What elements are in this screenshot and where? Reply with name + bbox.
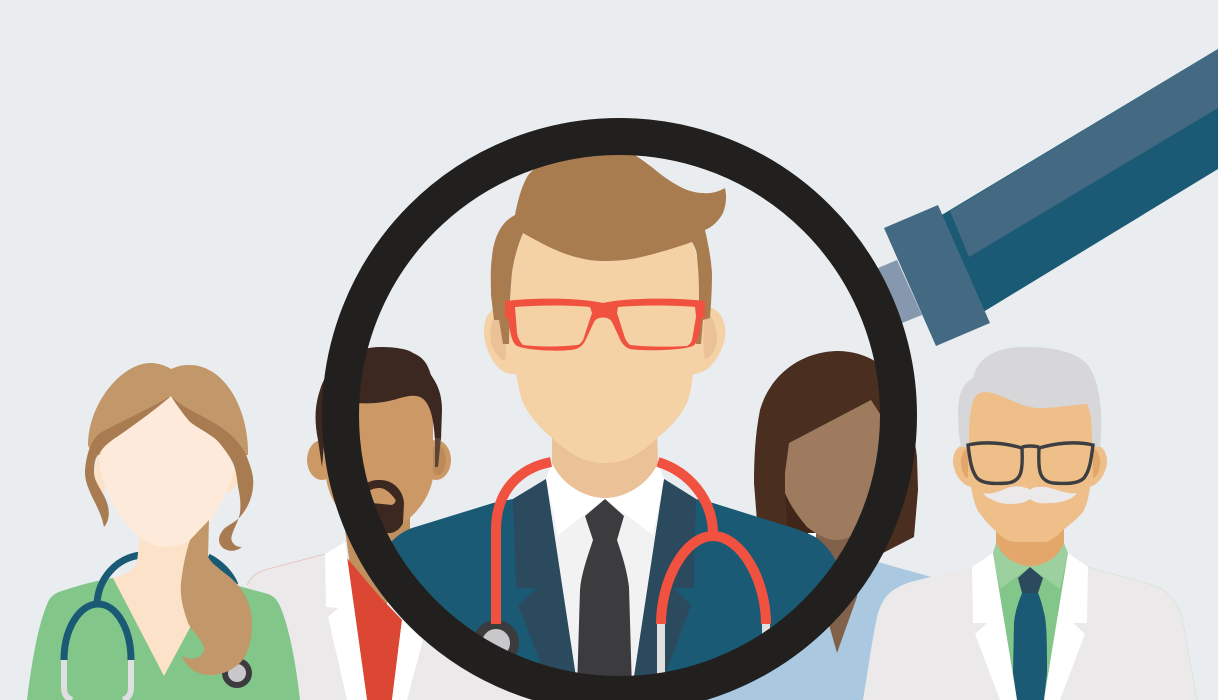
dark hair band: [85, 396, 253, 551]
magnifying glass ring: [340, 136, 898, 694]
stethoscope fork: [64, 604, 131, 660]
scrubs body: [27, 578, 300, 700]
face: [969, 392, 1092, 542]
tie knot: [585, 499, 624, 540]
ponytail: [181, 520, 252, 675]
moustache: [983, 486, 1077, 504]
lapels: [972, 553, 1017, 700]
white collar: [546, 464, 664, 535]
person: woman with brown hair and blue coat: [690, 351, 935, 700]
tie: [1013, 593, 1047, 700]
tie knot: [1018, 567, 1043, 593]
stethoscope chest piece: [478, 624, 514, 662]
hair: [491, 154, 726, 344]
person: older doctor with grey hair: [863, 347, 1197, 700]
right lapel: [632, 479, 696, 690]
red stethoscope: [496, 462, 766, 624]
stethoscope neck tube: [97, 555, 235, 604]
stethoscope lower tubes: [64, 660, 131, 700]
tie: [578, 540, 632, 676]
back hair: [88, 363, 248, 455]
left lapel: [513, 479, 576, 672]
grey hair: [958, 347, 1101, 447]
neck and v-neckline: [113, 535, 193, 676]
shirt: [993, 553, 1068, 700]
stethoscope chest piece: [225, 661, 249, 685]
suit jacket: [392, 479, 836, 676]
neck: [552, 438, 658, 498]
featured doctor seen through lens: [392, 155, 836, 676]
person: nurse in green scrubs: [27, 363, 300, 700]
face: [510, 233, 702, 463]
ears: [94, 455, 238, 493]
ears: [953, 445, 975, 487]
ears: [484, 308, 726, 374]
coat edge line: [1088, 567, 1197, 700]
inner ears: [490, 315, 717, 360]
neck: [996, 525, 1064, 566]
stethoscope lower tubes: [657, 624, 770, 674]
lab coat: [863, 567, 1197, 700]
magnifying glass handle: [878, 49, 1218, 346]
person: man with beard and red shirt: [240, 347, 560, 700]
glasses: [968, 443, 1093, 483]
collar: [993, 543, 1068, 589]
face: [99, 396, 234, 547]
red glasses: [505, 299, 705, 351]
shirt front: [546, 479, 664, 690]
